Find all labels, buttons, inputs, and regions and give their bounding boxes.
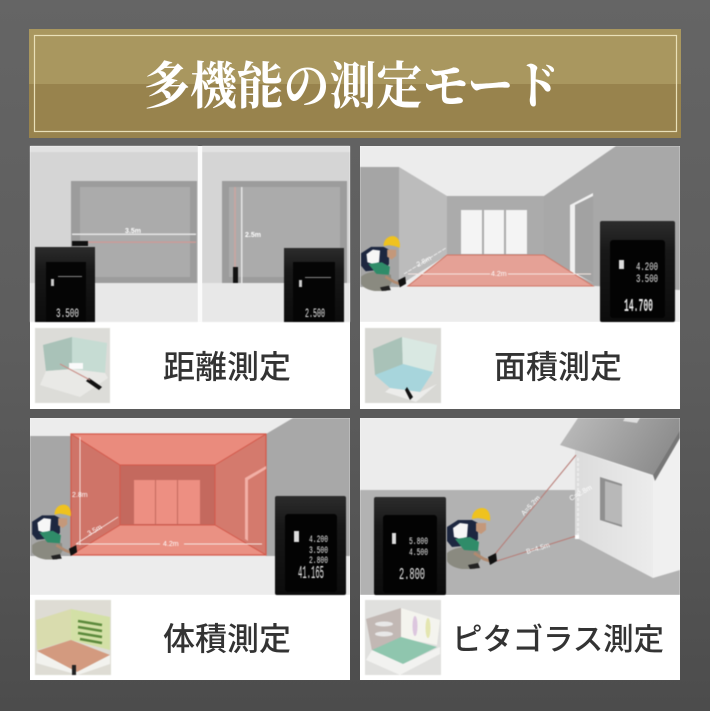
device: 2.800: 4.500 [409,548,428,559]
scene: room floor [360,146,680,322]
caption: 面積測定 [494,349,622,385]
device: 3.500 [35,247,95,322]
scene: height measurement [202,146,350,322]
scene: house [360,418,680,595]
divider [198,146,202,322]
device: 14.700: 4.200 [636,262,658,274]
panel: distance measurement [30,146,350,409]
panel: Pythagorean measurement [360,418,680,680]
device: 3.500: 3.500 [56,306,79,321]
caption: 距離測定 [163,349,291,385]
thumbnail: area [365,328,441,403]
device: 2.500: 2.500 [305,306,325,321]
thumbnail: pythagoras [365,600,441,675]
panel: area measurement [360,146,680,409]
device: 2.800 [374,497,446,595]
caption: 体積測定 [163,621,291,657]
scene: house: C=2.8m [568,484,594,503]
scene: room floor: 4.2m [491,271,507,278]
scene: house: B=4.5m [526,542,551,556]
thumbnail: volume [35,600,111,675]
caption: ピタゴラス測定 [452,623,664,657]
device: 41.165 [275,496,346,595]
device: 14.700: 14.700 [624,297,653,317]
device: 41.165: 41.165 [298,564,324,584]
scene: room floor: 2.8m [416,255,433,269]
device: 2.500 [284,248,344,322]
scene: height measurement: 2.5m [245,232,261,239]
scene: width measurement [30,146,198,322]
scene: width measurement: 3.5m [125,228,141,235]
device: 14.700 [600,221,675,322]
title: 多機能の測定モード [144,45,560,119]
panel: volume measurement [30,418,350,680]
scene: red cuboid: 2.8m [72,492,88,499]
title banner [29,29,681,138]
device: 41.165: 3.500 [309,546,328,557]
device: 2.800: 2.800 [399,566,425,585]
device: 2.800: 5.800 [409,537,428,548]
device: 41.165: 2.800 [309,556,328,567]
device: 41.165: 4.200 [309,535,328,546]
scene: red cuboid: 4.2m [163,541,179,548]
scene: red cuboid: 3.5m [86,524,104,538]
scene: house: A=5.2m [520,495,542,517]
thumbnail: distance [35,328,110,403]
scene: red cuboid [30,418,350,595]
device: 14.700: 3.500 [636,274,658,286]
